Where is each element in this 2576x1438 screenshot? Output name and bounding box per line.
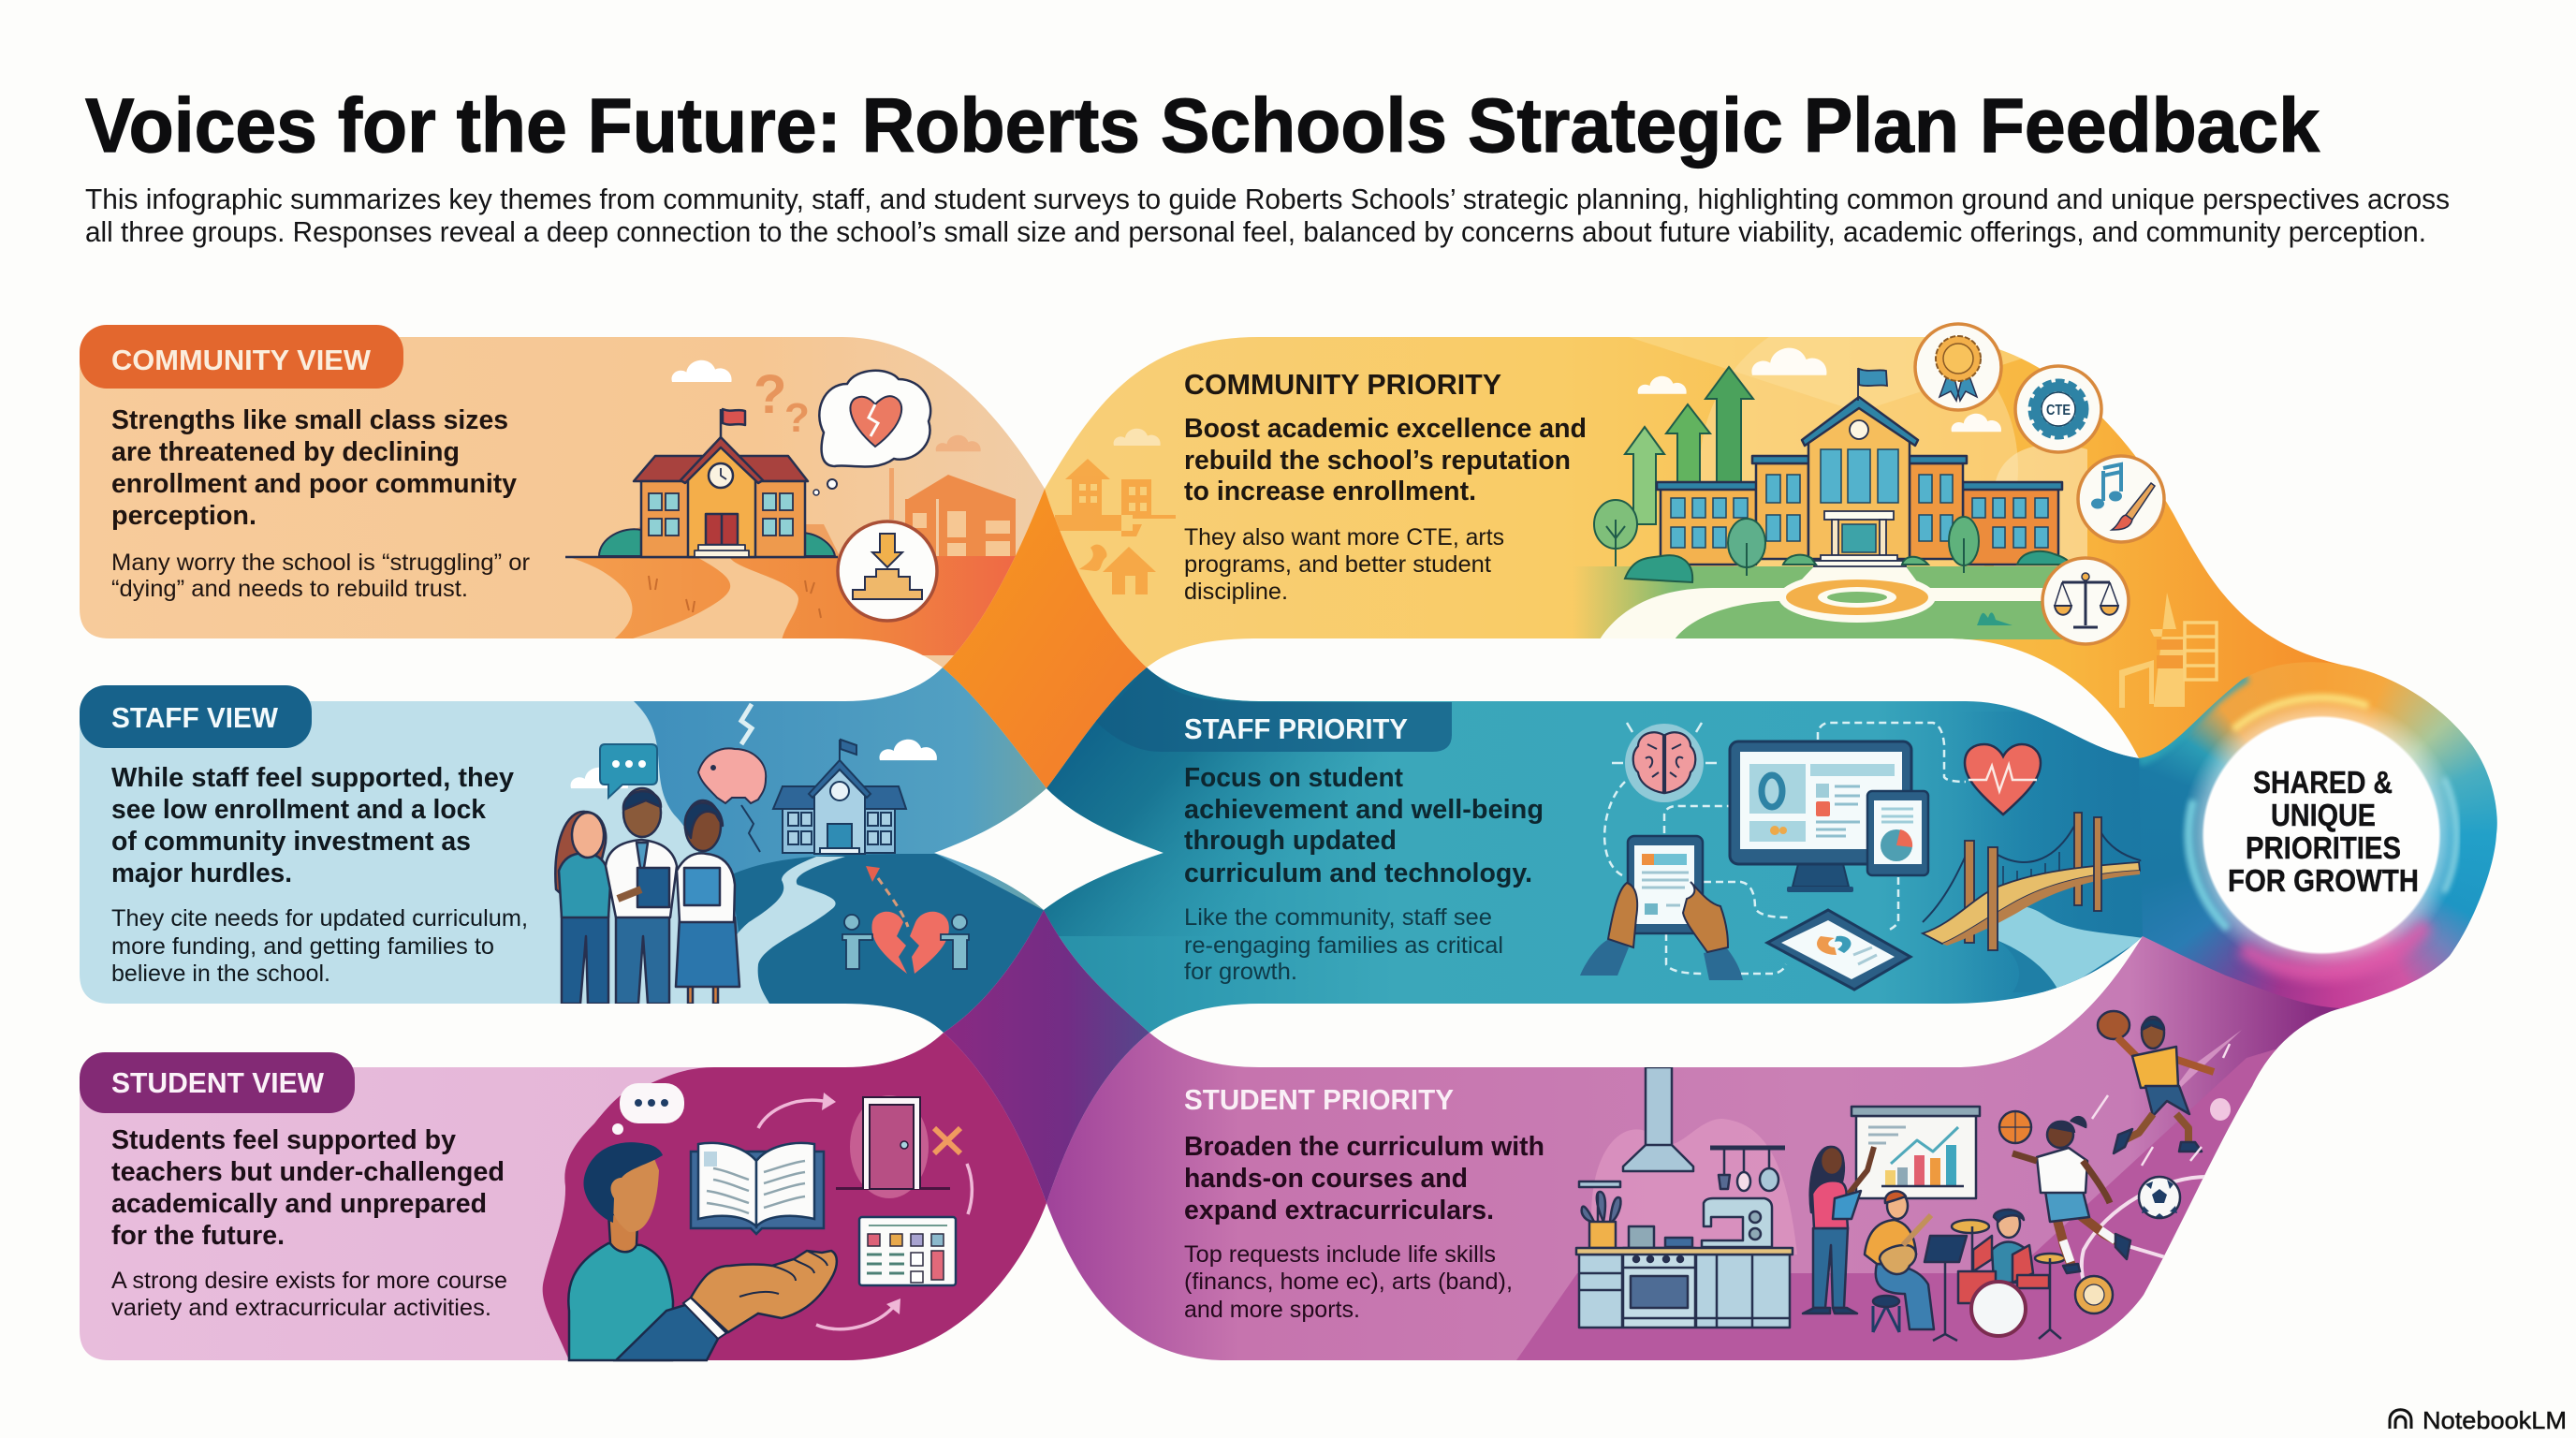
text: community priority: They also want more CTE, arts (1184, 524, 1504, 550)
text: community view: enrollment and poor community (111, 469, 517, 499)
question marks: ? (754, 364, 786, 425)
text: student view (111, 1125, 507, 1321)
text: student priority: expand extracurriculars. (1184, 1196, 1494, 1225)
text: staff view: believe in the school. (111, 961, 330, 987)
faded town icons (1055, 459, 1176, 594)
hub: center circle text: SHARED & (2253, 765, 2393, 800)
text: staff view: see low enrollment and a lock (111, 795, 487, 825)
people: teacher (1803, 1147, 1874, 1313)
field arcs (2082, 1177, 2213, 1287)
icon: award ribbon (1915, 324, 2001, 410)
school (565, 556, 838, 558)
text: staff priority: curriculum and technology. (1184, 858, 1532, 888)
text: student view: for the future. (111, 1221, 285, 1251)
ground (565, 556, 1048, 655)
river (1998, 906, 2144, 992)
icon: brain (1612, 723, 1717, 802)
people: three staff members (555, 788, 739, 1004)
text: community priority: Boost academic excellence and (1184, 414, 1587, 444)
question marks: ? (784, 395, 810, 441)
panel: staff priority (1044, 668, 2143, 1033)
small school (773, 740, 906, 854)
icon: CTE gear (2015, 366, 2101, 452)
icon: monitor (1730, 741, 1911, 892)
text: student priority: and more sports. (1184, 1297, 1360, 1323)
text: community priority: rebuild the school’s reputation (1184, 446, 1571, 476)
text: staff view (111, 763, 528, 987)
people: guitarist (1865, 1191, 1934, 1332)
crossing: purple (944, 910, 1149, 1203)
text: community priority: to increase enrollment. (1184, 477, 1476, 506)
icon: music and paintbrush (2078, 456, 2164, 542)
icon: scales (2042, 558, 2129, 644)
hub: center circle text: PRIORITIES (2246, 830, 2401, 865)
text: community view: Strengths like small class sizes (111, 405, 508, 435)
presentation board (1852, 1107, 1980, 1198)
text: student view: academically and unprepared (111, 1189, 487, 1219)
text: community priority: programs, and better student (1184, 551, 1491, 578)
icon: tablet right (1867, 791, 1928, 875)
text: student view: Students feel supported by (111, 1125, 456, 1155)
text: community view: are threatened by declining (111, 437, 460, 467)
text: student priority (1184, 1132, 1544, 1323)
badge: staff priority (1095, 668, 1452, 752)
text: student view: variety and extracurricular activities. (111, 1295, 491, 1321)
people: drummer (1952, 1210, 2065, 1339)
badge: community view (80, 325, 403, 389)
title: Voices for the Future: Roberts Schools Strategic Plan Feedback (85, 83, 2320, 169)
hub: shared priorities ring (2125, 646, 2509, 1020)
text: student priority: (financs, home ec), arts (band), (1184, 1269, 1513, 1295)
icon: speech bubble (600, 744, 657, 798)
hub: center circle text: UNIQUE (2271, 798, 2376, 832)
text: staff priority: for growth. (1184, 959, 1297, 985)
ground (1573, 566, 2073, 639)
school building (1657, 397, 2062, 565)
icon: tilted tablet (1767, 910, 1910, 990)
green arrows (1625, 367, 1753, 524)
panel: student priority (1046, 936, 2396, 1360)
icon: open book (691, 1143, 824, 1234)
icon: thought bubble with broken heart (813, 371, 930, 495)
text: community view: Many worry the school is “struggling” or (111, 550, 530, 576)
crossing: orange (943, 489, 1147, 788)
text: staff priority (1184, 763, 1544, 985)
text: community view: “dying” and needs to rebuild trust. (111, 576, 468, 602)
text: staff view: While staff feel supported, they (111, 763, 514, 793)
staff priority scene (1603, 712, 2143, 1002)
badge: student view (80, 1052, 355, 1113)
text: staff priority: Like the community, staff see (1184, 904, 1492, 931)
text: staff priority: achievement and well-being (1184, 795, 1544, 825)
music stand (1925, 1236, 1967, 1341)
icon: CTE gear: CTE (2046, 403, 2071, 418)
text: community priority (1184, 414, 1587, 605)
kitchen (1576, 1067, 1793, 1328)
hub: center circle text: FOR GROWTH (2228, 863, 2419, 898)
town silhouette (889, 468, 1016, 557)
question marks (754, 364, 810, 441)
text: staff priority: re-engaging families as critical (1184, 932, 1503, 959)
faded skyline (2119, 593, 2217, 708)
student view blob (543, 1033, 1046, 1360)
badge: staff view (80, 685, 312, 748)
icon: bridge (1923, 813, 2144, 950)
panel: community view (80, 325, 1048, 668)
sleeve and hand (616, 1304, 718, 1360)
text: staff priority: Focus on student (1184, 763, 1403, 793)
badge: student view: STUDENT VIEW (111, 1066, 325, 1099)
text: staff view: more funding, and getting families to (111, 933, 494, 960)
text: community priority: discipline. (1184, 579, 1288, 605)
badge: community view: COMMUNITY VIEW (111, 344, 372, 376)
text: staff priority: through updated (1184, 826, 1397, 856)
text: student priority: Top requests include life skills (1184, 1241, 1496, 1268)
text: staff view: They cite needs for updated curriculum, (111, 905, 528, 932)
heading: community priority: COMMUNITY PRIORITY (1184, 368, 1501, 401)
heading: student priority: STUDENT PRIORITY (1184, 1083, 1454, 1116)
panel: community priority (1045, 309, 2341, 758)
text: student priority: Broaden the curriculum with (1184, 1132, 1544, 1162)
text: student priority: hands-on courses and (1184, 1164, 1468, 1194)
text: student view: A strong desire exists for more course (111, 1268, 507, 1294)
heading: staff priority: STAFF PRIORITY (1184, 712, 1408, 745)
dark shading near the crossing (1044, 668, 1374, 936)
badge: staff view: STAFF VIEW (111, 701, 279, 734)
icon: declining foundation badge (838, 521, 937, 621)
logo: NotebookLM: NotebookLM (2422, 1406, 2567, 1434)
text: staff view: major hurdles. (111, 858, 292, 888)
intro text (85, 183, 2450, 248)
text: community view (111, 405, 530, 602)
dashed connectors (1604, 723, 1966, 974)
arrows (758, 1100, 972, 1329)
hub: glowing ring arcs (2139, 676, 2456, 974)
community view scene: school and town (565, 360, 1048, 655)
hub: center circle text (2204, 718, 2438, 952)
icon: piggy bank (698, 748, 766, 803)
icon: door with X (836, 1095, 960, 1198)
panel: student view (80, 1033, 1046, 1360)
trees and bushes (1594, 500, 2071, 582)
cloud (1114, 429, 1161, 446)
panel: staff view (80, 655, 1058, 1039)
sports: players and balls (1999, 1011, 2214, 1313)
floor (1516, 1049, 2276, 1360)
text: community view: perception. (111, 501, 256, 531)
person with thought bubble (568, 1083, 837, 1360)
text: staff view: of community investment as (111, 827, 471, 857)
student priority scene (1516, 1011, 2340, 1360)
staff view scene: storm, school and road (571, 655, 1058, 1039)
text: student view: teachers but under-challenged (111, 1157, 505, 1187)
intro text: all three groups. Responses reveal a deep connection to the school’s small size and personal feel, balanced by concerns about future viability, academic offerings, and community perception. (85, 215, 2426, 248)
icon: broken heart with families (842, 866, 969, 974)
intro text: This infographic summarizes key themes from community, staff, and student surveys to guide Roberts Schools’ strategic planning, highlighting common ground and unique perspectives across (85, 183, 2450, 215)
community priority scene: school and growth arrows (1573, 309, 2087, 639)
dark bridge side (1965, 712, 2143, 1002)
icon: heart with pulse (1965, 744, 2041, 814)
icon: hands holding tablet (1580, 836, 1743, 980)
icon: schedule (859, 1217, 956, 1285)
